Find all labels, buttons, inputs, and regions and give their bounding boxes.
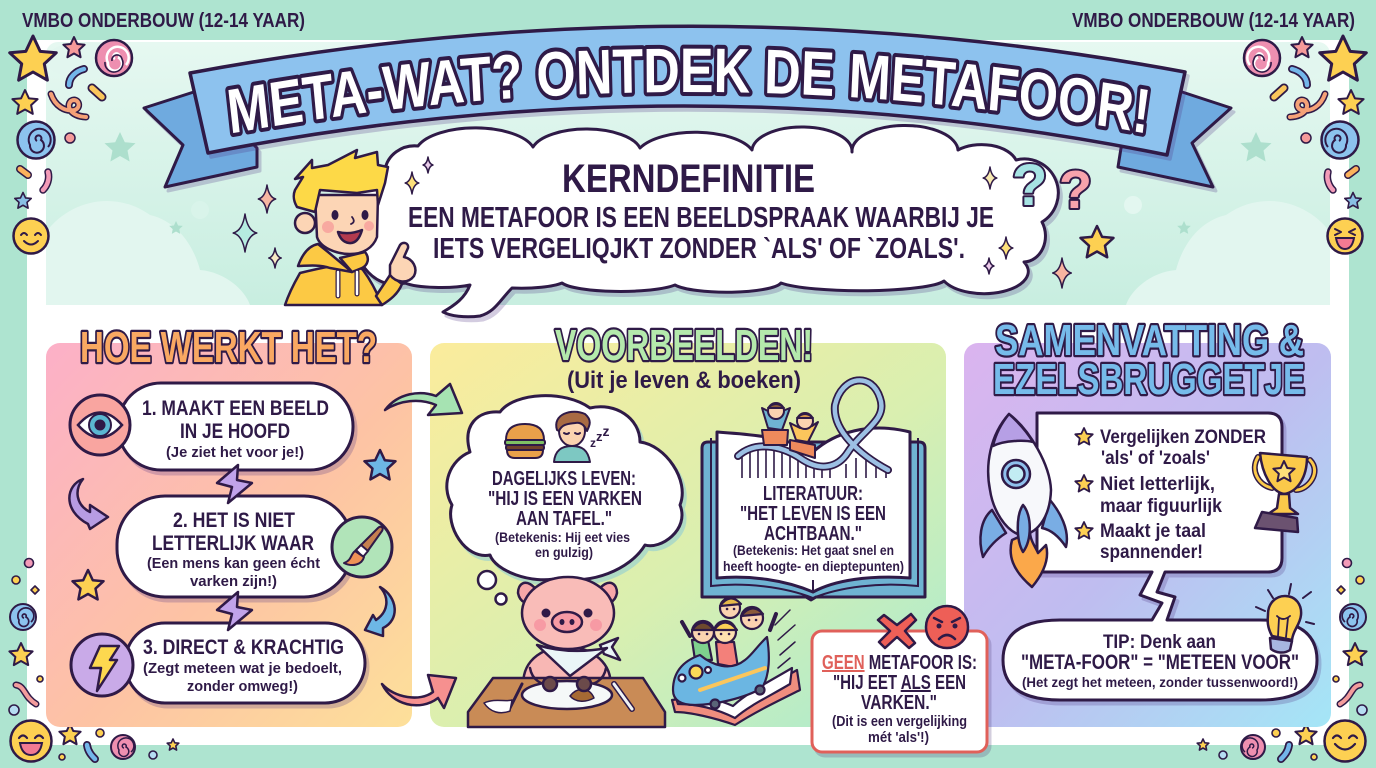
callout text: "HIJ EET ALS EEN (833, 672, 966, 694)
summary text: Niet letterlijk, (1100, 474, 1215, 495)
callout: geen metafoor (812, 606, 987, 752)
panel: top hero background (45, 42, 1330, 305)
eyes (332, 210, 368, 220)
speed lines (775, 610, 795, 668)
summary text: Vergelijken ZONDER (1100, 427, 1266, 448)
star: yellow near cloud (1081, 226, 1113, 257)
summary text: maar figuurlijk (1100, 496, 1222, 517)
connector bolt 1 (217, 465, 252, 503)
step 2: varken zijn!) (190, 573, 277, 590)
step 2: 2. HET IS NIET (173, 509, 295, 532)
banner tail left (144, 90, 257, 187)
panel: voorbeelden (382, 321, 946, 727)
fork (510, 684, 522, 708)
icon: eye (70, 395, 130, 455)
thought text: (Betekenis: Hij eet vies (495, 529, 630, 545)
callout text (822, 652, 977, 746)
smiley: bottom left (10, 720, 52, 762)
kid torsos (692, 640, 712, 660)
definition text (408, 202, 994, 265)
coaster supports (742, 448, 886, 478)
character: boy in hoodie (285, 150, 415, 305)
panel: samenvatting (964, 316, 1331, 727)
summary bubble (1003, 413, 1317, 700)
hoodie strings (338, 272, 357, 296)
step 1 (70, 383, 353, 470)
pig head (522, 577, 614, 649)
banner main ribbon (190, 26, 1185, 155)
smiley: bottom right (1324, 720, 1366, 762)
star: yellow (72, 570, 104, 599)
hair (294, 150, 388, 212)
tip text: TIP: Denk aan (1103, 632, 1216, 653)
label: audience left: VMBO ONDERBOUW (12-14 YAAR) (22, 10, 305, 32)
thought text: "HIJ IS EEN VARKEN (488, 488, 642, 510)
summary text: spannender! (1100, 542, 1203, 563)
icon: red cross (878, 614, 916, 648)
cloud shape (351, 126, 1058, 317)
icon: angry face (926, 606, 968, 648)
tip text: (Het zegt het meteen, zonder tussenwoord!) (1022, 674, 1298, 690)
corner decoration: top left (10, 36, 132, 208)
step 3: zonder omweg!) (187, 678, 298, 695)
thought text: AAN TAFEL." (516, 508, 612, 530)
callout text: VARKEN." (861, 692, 937, 714)
background clouds (45, 42, 1330, 305)
star: blue (364, 450, 396, 479)
thought text: DAGELIJKS LEVEN: (492, 468, 636, 490)
arrow: purple (69, 479, 108, 529)
coaster track (738, 380, 888, 470)
card (812, 631, 987, 752)
hand pointing (390, 243, 415, 282)
kid faces (699, 609, 756, 634)
step 1: 1. MAAKT EEN BEELD (142, 397, 329, 420)
book text: LITERATUUR: (763, 483, 863, 505)
corner decoration: bottom left (9, 558, 179, 760)
definition text: IETS VERGELIQJKT ZONDER `ALS' OF `ZOALS'. (433, 233, 965, 265)
panel background (964, 343, 1331, 727)
banner tail right (1118, 90, 1231, 187)
pig body (523, 645, 611, 698)
bandana (537, 645, 607, 676)
ear (295, 213, 315, 233)
step 3 (71, 623, 365, 703)
icon: trophy (1255, 453, 1315, 532)
step 3: (Zegt meteen wat je bedoelt, (143, 660, 342, 677)
step 1: (Je ziet het voor je!) (166, 444, 304, 461)
pig hands (543, 677, 557, 691)
pig ears (518, 583, 535, 603)
panel: hoe werkt het (46, 323, 412, 727)
book text: "HET LEVEN IS EEN (740, 503, 886, 525)
hoodie body (285, 264, 382, 305)
corner decoration: bottom right (1197, 558, 1367, 760)
book text: (Betekenis: Het gaat snel en (733, 542, 894, 558)
icon: lightbulb (1256, 584, 1314, 653)
thought text: en gulzig) (535, 544, 593, 560)
zzz: z (596, 429, 603, 444)
speech cloud: kerndefinitie (351, 126, 1058, 317)
step 1: IN JE HOOFD (180, 420, 290, 443)
icon: sleeping boy (554, 412, 590, 462)
heading: HOE WERKT HET? (80, 323, 377, 372)
summary text: 'als' of 'zoals' (1101, 448, 1210, 469)
kid heads (720, 598, 740, 618)
question mark: pink: ? (1059, 160, 1092, 220)
bandana knot (600, 638, 620, 660)
mouth (338, 230, 362, 243)
step 2: (Een mens kan geen écht (147, 555, 320, 572)
plate (522, 681, 612, 709)
smiley: top right laughing (1328, 218, 1362, 254)
illustration: pig at table (468, 577, 665, 727)
heading: kerndefinitie: KERNDEFINITIE (562, 157, 815, 201)
hood (298, 244, 352, 272)
panel background (430, 343, 946, 727)
step 3: 3. DIRECT & KRACHTIG (143, 636, 344, 659)
nose (351, 217, 354, 224)
callout text: (Dit is een vergelijking (832, 714, 967, 730)
icon: paintbrush (332, 517, 392, 577)
book pages (717, 428, 910, 592)
heading: SAMENVATTING & (995, 316, 1304, 365)
zzz: z (602, 423, 610, 439)
icon: lightning (71, 634, 133, 696)
callout text: mét 'als'!) (868, 730, 929, 746)
step 2: LETTERLIJK WAAR (152, 532, 314, 555)
kid arms (682, 614, 776, 636)
icon: rocket (980, 414, 1067, 587)
step 2 (117, 496, 392, 597)
arrow: pink (382, 675, 456, 708)
tip text (1021, 632, 1299, 690)
small book (672, 670, 800, 725)
title text: META-WAT? ONTDEK DE METAFOOR! (225, 44, 1151, 137)
connector bolt 2 (217, 592, 252, 630)
panel background (46, 343, 412, 727)
sparkles around cloud (233, 157, 1071, 288)
thought bubble (447, 396, 682, 604)
subheading: (Uit je leven & boeken) (567, 367, 801, 394)
arrow: blue (365, 587, 395, 636)
thought text (488, 468, 642, 560)
summary text (1100, 427, 1266, 563)
face (315, 195, 378, 254)
heading (993, 316, 1305, 404)
car body (673, 637, 769, 705)
callout text: GEEN METAFOOR IS: (822, 652, 977, 674)
arrow: green (385, 384, 462, 415)
question mark: teal: ? (1012, 153, 1047, 218)
book text: heeft hoogte- en dieptepunten) (723, 558, 904, 574)
background faint stars (104, 132, 1272, 234)
tip text: "META-FOOR" = "METEEN VOOR" (1021, 651, 1299, 674)
bullet stars (1075, 428, 1093, 539)
knife (614, 684, 632, 709)
pig eyes (542, 608, 592, 618)
icon: burger (505, 424, 545, 458)
heading: VOORBEELDEN! (555, 321, 813, 370)
book text (723, 483, 904, 574)
illustration: open book with rollercoaster (702, 380, 925, 600)
title banner (142, 24, 1236, 227)
table (468, 678, 665, 727)
definition text: EEN METAFOOR IS EEN BEELDSPRAAK WAARBIJ JE (408, 202, 994, 234)
pig arms (530, 668, 606, 684)
coaster riders (762, 403, 818, 458)
book text: ACHTBAAN." (764, 523, 862, 545)
illustration: coaster car with kids on book (672, 598, 800, 725)
pig snout (552, 612, 582, 632)
zzz: z (590, 436, 596, 450)
book cover (702, 442, 925, 600)
smiley: top left (14, 218, 48, 254)
summary text: Maakt je taal (1100, 521, 1206, 542)
corner decoration: top right (1244, 36, 1366, 208)
